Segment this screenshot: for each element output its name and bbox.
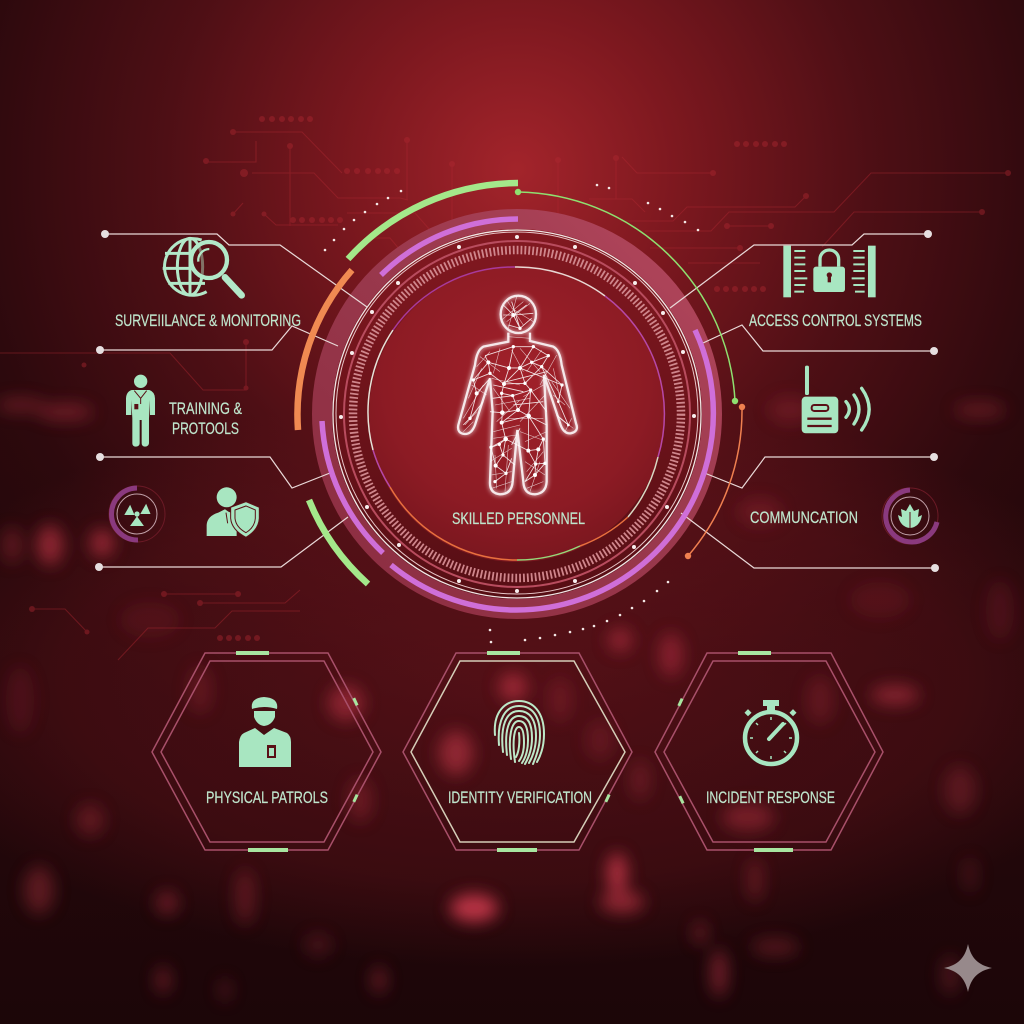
label: surveillance and monitoring: SURVEIILANCE & MONITORING (115, 311, 301, 330)
icon: globe and magnifier (163, 238, 242, 295)
purple arcs (381, 219, 518, 275)
icon: guard (239, 697, 291, 767)
label: training and protocols: PROTOOLS (172, 419, 239, 438)
icon: person with lanyard (126, 375, 155, 447)
label: skilled personnel: SKILLED PERSONNEL (452, 509, 585, 528)
dotted outer arcs (324, 184, 699, 643)
blurred city lights background (0, 396, 1014, 1002)
icon: sparkle watermark (944, 944, 992, 992)
dense mesh lines (463, 297, 573, 492)
orange thin arc right (685, 404, 745, 559)
label: IDENTITY VERIFICATION (448, 788, 592, 807)
mesh nodes (468, 313, 570, 483)
hexagon frame (403, 653, 632, 850)
panel: identity verification (403, 651, 632, 852)
icon: fingerprint (495, 701, 544, 764)
icon: network human figure (458, 296, 577, 494)
coloured arc segments (297, 183, 745, 610)
central ring dial (322, 219, 712, 609)
green arc lower left (309, 500, 368, 584)
dark inner disc (332, 229, 702, 599)
icon: access control lock (783, 246, 876, 297)
figure outline (458, 296, 577, 494)
icon: person with shield (207, 487, 259, 537)
ring node dots (339, 235, 696, 593)
label: training and protocols: TRAINING & (169, 399, 242, 418)
tick ring (353, 250, 681, 578)
green thin arc right (515, 189, 738, 404)
hexagon accents (487, 651, 611, 852)
background circuit traces (0, 116, 1011, 660)
bottom darkening overlay (0, 440, 1024, 1024)
hexagon frame (152, 653, 381, 850)
hexagon accents (677, 651, 793, 852)
panel: incident response (655, 651, 883, 852)
outer band (322, 219, 712, 609)
icon: radio with signal waves (802, 366, 869, 433)
orange thick arc left (297, 270, 352, 430)
icon: leaf dial (882, 488, 938, 544)
icon: radiation dial (109, 486, 165, 542)
label: communication: COMMUNCATION (750, 508, 858, 527)
pink inner ring (344, 241, 690, 587)
label: training and protocols (169, 399, 242, 438)
label: access control systems: ACCESS CONTROL SYSTEMS (749, 311, 922, 330)
label: PHYSICAL PATROLS (206, 788, 328, 807)
label: INCIDENT RESPONSE (706, 788, 835, 807)
hexagon frame (655, 653, 883, 850)
panel: physical patrols (152, 651, 381, 852)
hexagon accents (236, 651, 359, 852)
soft lower glow (0, 300, 1024, 1024)
leader lines with end dots (95, 230, 939, 572)
mesh lines (463, 302, 568, 482)
centre disc (369, 266, 665, 562)
white rim circles (333, 230, 701, 598)
green thick arc top (348, 183, 518, 259)
inner multi-coloured circle (368, 267, 664, 560)
icon: stopwatch (744, 700, 797, 764)
